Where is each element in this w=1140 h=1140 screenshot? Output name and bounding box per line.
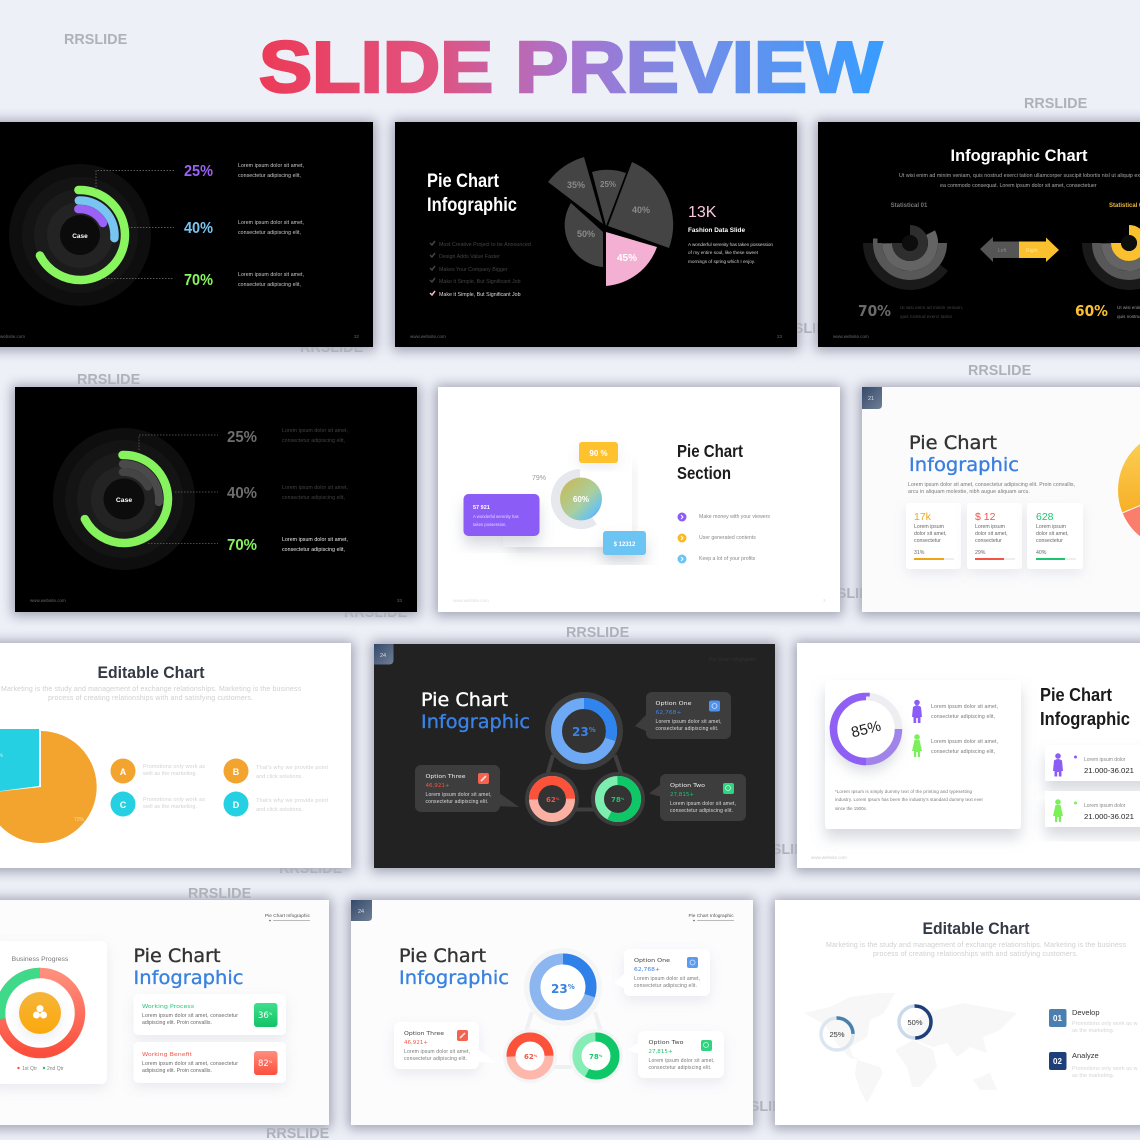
legend descriptions: That's why we provide point (256, 798, 328, 804)
card working process (134, 994, 286, 1035)
item 01 (1049, 1008, 1137, 1034)
watermarks behind slides: RRSLIDE (344, 605, 408, 621)
callout option two (627, 1031, 724, 1078)
title: SLIDE PREVIEW (259, 28, 882, 108)
callout option one (635, 692, 731, 739)
heading: Pie Chart (421, 689, 508, 711)
stat card 17k: Lorem ipsum (914, 524, 944, 530)
panel: dark pie chart infographic (374, 644, 775, 868)
watermark labels: RRSLIDE (64, 32, 128, 48)
badge C: C (120, 800, 127, 810)
dotted leader lines (96, 170, 174, 278)
ring chart: Case (116, 497, 132, 504)
concentric ring chart (9, 164, 151, 306)
ring chart (53, 428, 195, 570)
side card green (1045, 791, 1140, 827)
text block: A wonderful serenity has taken possession (688, 242, 773, 247)
purple card: A wonderful serenity has (473, 514, 519, 519)
donut 25% (821, 1018, 853, 1050)
watermarks behind slides: RRSLIDE (816, 586, 880, 602)
subtitle: process of creating relationships with and satisfying customers. (873, 951, 1078, 958)
legend: 1st Qtr (22, 1066, 37, 1072)
watermark labels: RRSLIDE (1024, 96, 1088, 112)
large donut 23% (545, 692, 623, 770)
panel: business progress (0, 900, 329, 1125)
descriptions: consectetur adipiscing elit, (282, 547, 345, 553)
heading accent: Infographic (421, 711, 530, 733)
back card shadow (503, 455, 635, 552)
small donut 62%: 62 (546, 796, 556, 804)
donut 85%: 85% (849, 718, 883, 741)
badge A: A (120, 767, 127, 777)
label 79%: 79% (532, 475, 546, 482)
bullet list (678, 512, 770, 564)
descriptions: consectetur adipiscing elit, (282, 438, 345, 444)
callout option one: Option One (634, 958, 671, 964)
footer (453, 598, 826, 603)
footer (410, 334, 783, 339)
card working benefit: adipiscing elit. Proin convallis. (142, 1068, 212, 1074)
stat card 628: 628 (1036, 511, 1054, 523)
side card green: 21.000-36.021 (1084, 812, 1134, 821)
stat card 628: 40% (1036, 550, 1047, 556)
exploded pie chart: 25% (600, 180, 616, 189)
legend descriptions (142, 764, 328, 813)
footnote (835, 789, 984, 811)
legend descriptions: That's why we provide point (256, 765, 328, 771)
donut 25%: 25% (829, 1030, 845, 1039)
small donut 62%: 62 (524, 1053, 534, 1061)
page tab: 24 (358, 909, 364, 915)
text block: Fashion Data Slide (688, 227, 746, 234)
checklist: Make it Simple, But Significant Job (439, 279, 521, 285)
legend descriptions: Promotions only work as (143, 764, 205, 770)
panel: pie chart infographic stats (862, 387, 1140, 612)
right note (1117, 305, 1140, 319)
heading: Pie Chart (909, 432, 997, 454)
callout option two: Lorem ipsum dolor sit amet, (670, 801, 736, 807)
large donut 23%: % (568, 983, 575, 991)
descriptions (282, 428, 348, 553)
person descriptions: Lorem ipsum dolor sit amet, (931, 704, 998, 710)
small donut 78%: 78 (589, 1053, 599, 1061)
badge C (110, 792, 136, 816)
main card (825, 680, 1021, 829)
page tab: 24 (380, 653, 386, 659)
heading: Pie Chart (1040, 684, 1112, 705)
bullet list: Keep a lot of your profits (699, 556, 756, 562)
page tab (862, 387, 882, 409)
card working benefit: 82 (258, 1059, 269, 1069)
footer: www.website.com (833, 334, 869, 339)
stat card 17k: dolor sit amet, (914, 531, 947, 537)
callout option three (415, 765, 519, 812)
card working benefit: Lorem ipsum dolor sit amet, consectetur (142, 1061, 238, 1067)
callout option three: consectetur adipiscing elit. (404, 1056, 467, 1062)
heading: Pie Chart (677, 441, 743, 461)
bullet list: User generated contents (699, 535, 756, 541)
text block: of my entire soul, like these sweet (688, 250, 759, 255)
badge B: B (233, 767, 240, 777)
subtitle (899, 173, 1140, 189)
card working benefit: % (269, 1060, 273, 1064)
footer: www.website.com (811, 855, 847, 860)
exploded pie chart (548, 157, 673, 286)
legend descriptions: and click solutions. (256, 774, 303, 780)
badge D: D (233, 800, 240, 810)
top tag (688, 913, 734, 921)
icon: purple person (912, 700, 922, 723)
page tab (374, 644, 394, 664)
footer (30, 598, 403, 603)
stat 25%: 25% (184, 163, 213, 180)
left note: quis nostrud exerci tation (900, 314, 952, 319)
small donut 62%: % (556, 797, 560, 801)
left statistical label: Statistical 01 (891, 203, 928, 209)
heading (677, 441, 743, 483)
item 02: Analyze (1072, 1051, 1099, 1060)
panel: editable chart pie (0, 643, 351, 868)
callout option two: consectetur adipiscing elit. (648, 1065, 712, 1071)
callout option one: consectetur adipiscing elit. (634, 983, 697, 989)
heading: Pie Chart (399, 945, 486, 967)
stat 60%: 60% (1075, 302, 1108, 320)
top tag: Pie Chart Infographic (688, 913, 734, 919)
item 01: Promotions only work as w (1072, 1021, 1137, 1027)
pie chart (1118, 430, 1140, 550)
stat card 628: dolor sit amet, (1036, 531, 1069, 537)
callout option two: consectetur adipiscing elit. (670, 808, 733, 814)
heading (1040, 684, 1130, 729)
item 02 (1049, 1051, 1137, 1079)
subtitle: process of creating relationships with and satisfying customers. (48, 695, 253, 702)
card working process: Working Process (142, 1004, 194, 1010)
chart card (0, 941, 107, 1084)
page tab (351, 900, 372, 921)
exploded pie chart: 45% (617, 253, 637, 264)
person descriptions: Lorem ipsum dolor sit amet, (931, 739, 998, 745)
stat card 628 (1027, 503, 1083, 569)
callout option three: Lorem ipsum dolor sit amet, (404, 1049, 470, 1055)
stat card 17k: 17k (914, 511, 932, 523)
top tag (265, 913, 311, 921)
stat 40%: 40% (184, 220, 213, 237)
footer: www.website.com (453, 598, 489, 603)
watermarks behind slides: RRSLIDE (729, 1099, 793, 1115)
dotted leader lines (139, 435, 218, 544)
side card green: Lorem ipsum dolor (1084, 803, 1126, 809)
large donut 23%: % (589, 726, 596, 734)
paragraph: arcu in aliquam molestie, nibh augue aliquam arcu. (908, 489, 1030, 495)
panel: dark case chart green (15, 387, 417, 612)
callout option one: consectetur adipiscing elit. (656, 726, 718, 732)
donut 50% (899, 1006, 931, 1038)
large donut 23% (524, 948, 602, 1026)
heading accent: Infographic (134, 967, 244, 989)
checklist (430, 241, 531, 298)
callout option three: Lorem ipsum dolor sit amet, (426, 792, 492, 798)
subtitle (1, 686, 302, 702)
callout option one: 62,768+ (634, 967, 660, 973)
legend descriptions: and click solutions. (256, 807, 303, 813)
stat 40%: 40% (227, 485, 257, 502)
callout option two: 27,815+ (648, 1049, 673, 1055)
descriptions: consectetur adipiscing elit, (238, 173, 301, 179)
footer: 3 (823, 598, 826, 603)
stat card $12: $ 12 (975, 511, 996, 523)
card title: Business Progress (12, 956, 69, 963)
heading: Infographic Chart (950, 146, 1088, 165)
footer: www.website.com (30, 598, 66, 603)
item 01: 01 (1053, 1014, 1062, 1023)
connectors (547, 755, 622, 810)
left right arrows: Right (1026, 248, 1038, 254)
stat 25%: 25% (227, 429, 257, 446)
footer: 32 (354, 334, 360, 339)
footer: 23 (777, 334, 783, 339)
callout option two: Option Two (648, 1040, 684, 1046)
side card purple: 21.000-36.021 (1084, 766, 1134, 775)
callout option three (394, 1022, 497, 1069)
watermarks behind slides: RRSLIDE (300, 340, 364, 356)
footnote: *Lorem Ipsum is simply dummy text of the printing and typesetting (835, 789, 973, 794)
purple card: taken possession. (473, 522, 507, 527)
heading (909, 432, 1019, 476)
callout option one (614, 949, 710, 996)
stat card $12: consectetur (975, 538, 1002, 544)
descriptions: Lorem ipsum dolor sit amet, (238, 272, 304, 278)
item 01: Develop (1072, 1008, 1100, 1017)
descriptions: Lorem ipsum dolor sit amet, (238, 163, 304, 169)
stat card $12: dolor sit amet, (975, 531, 1008, 537)
legend: 2nd Qtr (47, 1066, 64, 1072)
text block: mornings of spring which I enjoy. (688, 259, 755, 264)
page tab: 21 (868, 396, 874, 402)
callout option one: Lorem ipsum dolor sit amet, (656, 719, 722, 725)
concentric ring chart: Case (72, 233, 88, 240)
exploded pie chart: 35% (567, 180, 585, 190)
small donut 62% (503, 1029, 557, 1083)
connectors (526, 1012, 601, 1067)
heading: Infographic (909, 454, 1019, 476)
panel: light pie chart infographic (351, 900, 753, 1125)
item 01: as the marketing. (1072, 1028, 1115, 1034)
small donut 78%: 78 (611, 796, 621, 804)
heading: Pie Chart (427, 171, 500, 192)
heading (427, 171, 517, 216)
legend descriptions: well as the marketing. (142, 804, 197, 810)
callout option three: Option Three (404, 1031, 445, 1037)
subtitle: Marketing is the study and management of exchange relationships. Marketing is the business (826, 942, 1126, 949)
large donut 23%: 23 (551, 982, 568, 996)
top tag: Pie Chart Infographic (709, 657, 756, 663)
checklist: Make it Simple, But Significant Job (439, 292, 521, 298)
yellow badge: 90 % (589, 449, 608, 458)
donut chart (0, 973, 80, 1053)
watermarks behind slides: RRSLIDE (751, 842, 815, 858)
small donut 62%: % (534, 1054, 538, 1058)
footer: 33 (397, 598, 403, 603)
watermarks behind slides: RRSLIDE (279, 861, 343, 877)
footer (0, 334, 360, 339)
pie chart (0, 729, 97, 843)
card working process: % (269, 1012, 273, 1016)
stat card $12: 29% (975, 550, 986, 556)
card working process: adipiscing elit. Proin convallis. (142, 1020, 212, 1026)
left right arrows: Left (998, 248, 1007, 254)
watermarks behind slides (279, 321, 880, 1115)
panel: infographic chart dark (818, 122, 1140, 347)
legend (17, 1066, 64, 1072)
item 02: as the marketing. (1072, 1073, 1115, 1079)
heading: Infographic (427, 195, 517, 216)
large donut 23%: 23 (572, 725, 589, 739)
legend descriptions: Promotions only work as (143, 797, 205, 803)
small donut 78%: % (621, 797, 625, 801)
badge A (110, 758, 136, 784)
heading accent: Infographic (399, 967, 509, 989)
card working benefit: Working Benefit (142, 1052, 192, 1058)
heading: Editable Chart (98, 663, 205, 682)
panel: pie chart infographic people (797, 643, 1140, 868)
legend descriptions: well as the marketing. (142, 771, 197, 777)
card working benefit (134, 1042, 286, 1083)
left radial chart (851, 184, 969, 302)
yellow badge (579, 442, 618, 463)
checklist: Most Creative Project to be Announced (439, 242, 531, 248)
top tag: Pie Chart Infographic (265, 913, 311, 919)
donut chart: 60% (573, 495, 589, 504)
stat 70%: 70% (858, 302, 891, 320)
panel: pie chart section white (438, 387, 840, 612)
descriptions: Lorem ipsum dolor sit amet, (282, 428, 348, 434)
callout option one: Lorem ipsum dolor sit amet, (634, 976, 700, 982)
watermark labels: RRSLIDE (77, 372, 141, 388)
person descriptions: consectetur adipiscing elit, (931, 714, 995, 720)
purple card: 57 921 (473, 505, 490, 511)
callout option two: Option Two (670, 783, 706, 789)
panel: dark exploded pie (395, 122, 797, 347)
stat card $12 (967, 503, 1022, 569)
descriptions: Lorem ipsum dolor sit amet, (282, 485, 348, 491)
badge D (224, 792, 248, 816)
heading: Pie Chart (134, 945, 220, 967)
callout option three: Option Three (426, 774, 466, 780)
stat card 17k: consectetur (914, 538, 941, 544)
world map (804, 993, 1017, 1103)
left note (900, 305, 963, 319)
callout option three: consectetur adipiscing elit. (426, 799, 488, 805)
descriptions: consectetur adipiscing elit, (282, 495, 345, 501)
stat card 17k (906, 503, 961, 569)
stat card $12: Lorem ipsum (975, 524, 1005, 530)
left note: Ut wisi enim ad minim veniam, (900, 305, 963, 310)
text block (688, 227, 773, 264)
badge B (224, 758, 248, 784)
callout option two: 27,815+ (670, 792, 694, 798)
descriptions: Lorem ipsum dolor sit amet, (282, 537, 348, 543)
callout option one: 62,768+ (656, 710, 682, 716)
donut 85% (833, 696, 899, 762)
watermark labels: RRSLIDE (188, 886, 252, 902)
callout option two (649, 774, 746, 821)
panel: dark case chart coloured (0, 122, 373, 347)
callout option three: 46,921+ (426, 783, 450, 789)
descriptions: consectetur adipiscing elit, (238, 230, 301, 236)
stat card 628: consectetur (1036, 538, 1063, 544)
footnote: industry. Lorem Ipsum has been the industry's standard dummy text ever (835, 797, 984, 802)
stat 70%: 70% (184, 272, 213, 289)
callout option two: Lorem ipsum dolor sit amet, (648, 1058, 714, 1064)
stat 13K: 13K (688, 204, 717, 221)
blue badge (603, 531, 646, 555)
watermark labels: RRSLIDE (968, 363, 1032, 379)
footer: www.website.com (410, 334, 446, 339)
stat card 628: Lorem ipsum (1036, 524, 1066, 530)
person descriptions (931, 704, 998, 755)
panel: editable chart world map (775, 900, 1140, 1125)
watermarks behind slides: RRSLIDE (773, 321, 837, 337)
pie chart: 72% (74, 817, 85, 823)
side card purple (1045, 745, 1140, 781)
paragraph (908, 482, 1075, 495)
bullet list: Make money with your viewers (699, 514, 770, 520)
descriptions: consectetur adipiscing elit, (238, 282, 301, 288)
checklist: Design Adds Value Faster (439, 254, 500, 260)
descriptions: Lorem ipsum dolor sit amet, (238, 220, 304, 226)
subtitle: Marketing is the study and management of exchange relationships. Marketing is the business (1, 686, 302, 693)
exploded pie chart: 50% (577, 229, 595, 239)
watermark labels: RRSLIDE (566, 625, 630, 641)
heading: Infographic (1040, 708, 1130, 729)
footer: website.com (0, 334, 25, 339)
subtitle: ea commodo consequat. Lorem ipsum dolor sit amet, consectetuer (940, 183, 1097, 189)
paragraph: Lorem ipsum dolor sit amet, consectetur adipiscing elit. Proin convallis, (908, 482, 1075, 488)
small donut 78% (569, 1029, 623, 1083)
footnote: since the 1500s. (835, 806, 867, 811)
small donut 78% (591, 772, 645, 826)
subtitle: Ut wisi enim ad minim veniam, quis nostrud exerci tation ullamcorper suscipit lobortis nisl ut aliquip ex (899, 173, 1140, 179)
descriptions (238, 163, 304, 288)
item 02: 02 (1053, 1057, 1062, 1066)
side card purple: Lorem ipsum dolor (1084, 757, 1126, 763)
checklist: Makes Your Company Bigger (439, 267, 508, 273)
card working process: Lorem ipsum dolor sit amet, consectetur (142, 1013, 238, 1019)
exploded pie chart: 40% (632, 205, 650, 215)
purple card (464, 494, 540, 536)
stat 70%: 70% (227, 537, 257, 554)
callout option three: 46,921+ (404, 1040, 428, 1046)
small donut 62% (525, 772, 579, 826)
person descriptions: consectetur adipiscing elit, (931, 749, 995, 755)
item 02: Promotions only work as w (1072, 1066, 1137, 1072)
stat card 17k: 31% (914, 550, 925, 556)
heading: Editable Chart (922, 919, 1030, 938)
donut 50%: 50% (907, 1018, 923, 1027)
card working process: 36 (258, 1011, 269, 1021)
donut chart (546, 464, 616, 534)
callout option one: Option One (656, 701, 692, 707)
subtitle (826, 942, 1126, 958)
blue badge: $ 12312 (614, 542, 636, 548)
small donut 78%: % (599, 1054, 603, 1058)
heading: Section (677, 463, 731, 483)
right radial chart (1070, 184, 1140, 302)
left right arrows (980, 237, 1059, 262)
icon: green person (912, 734, 922, 757)
